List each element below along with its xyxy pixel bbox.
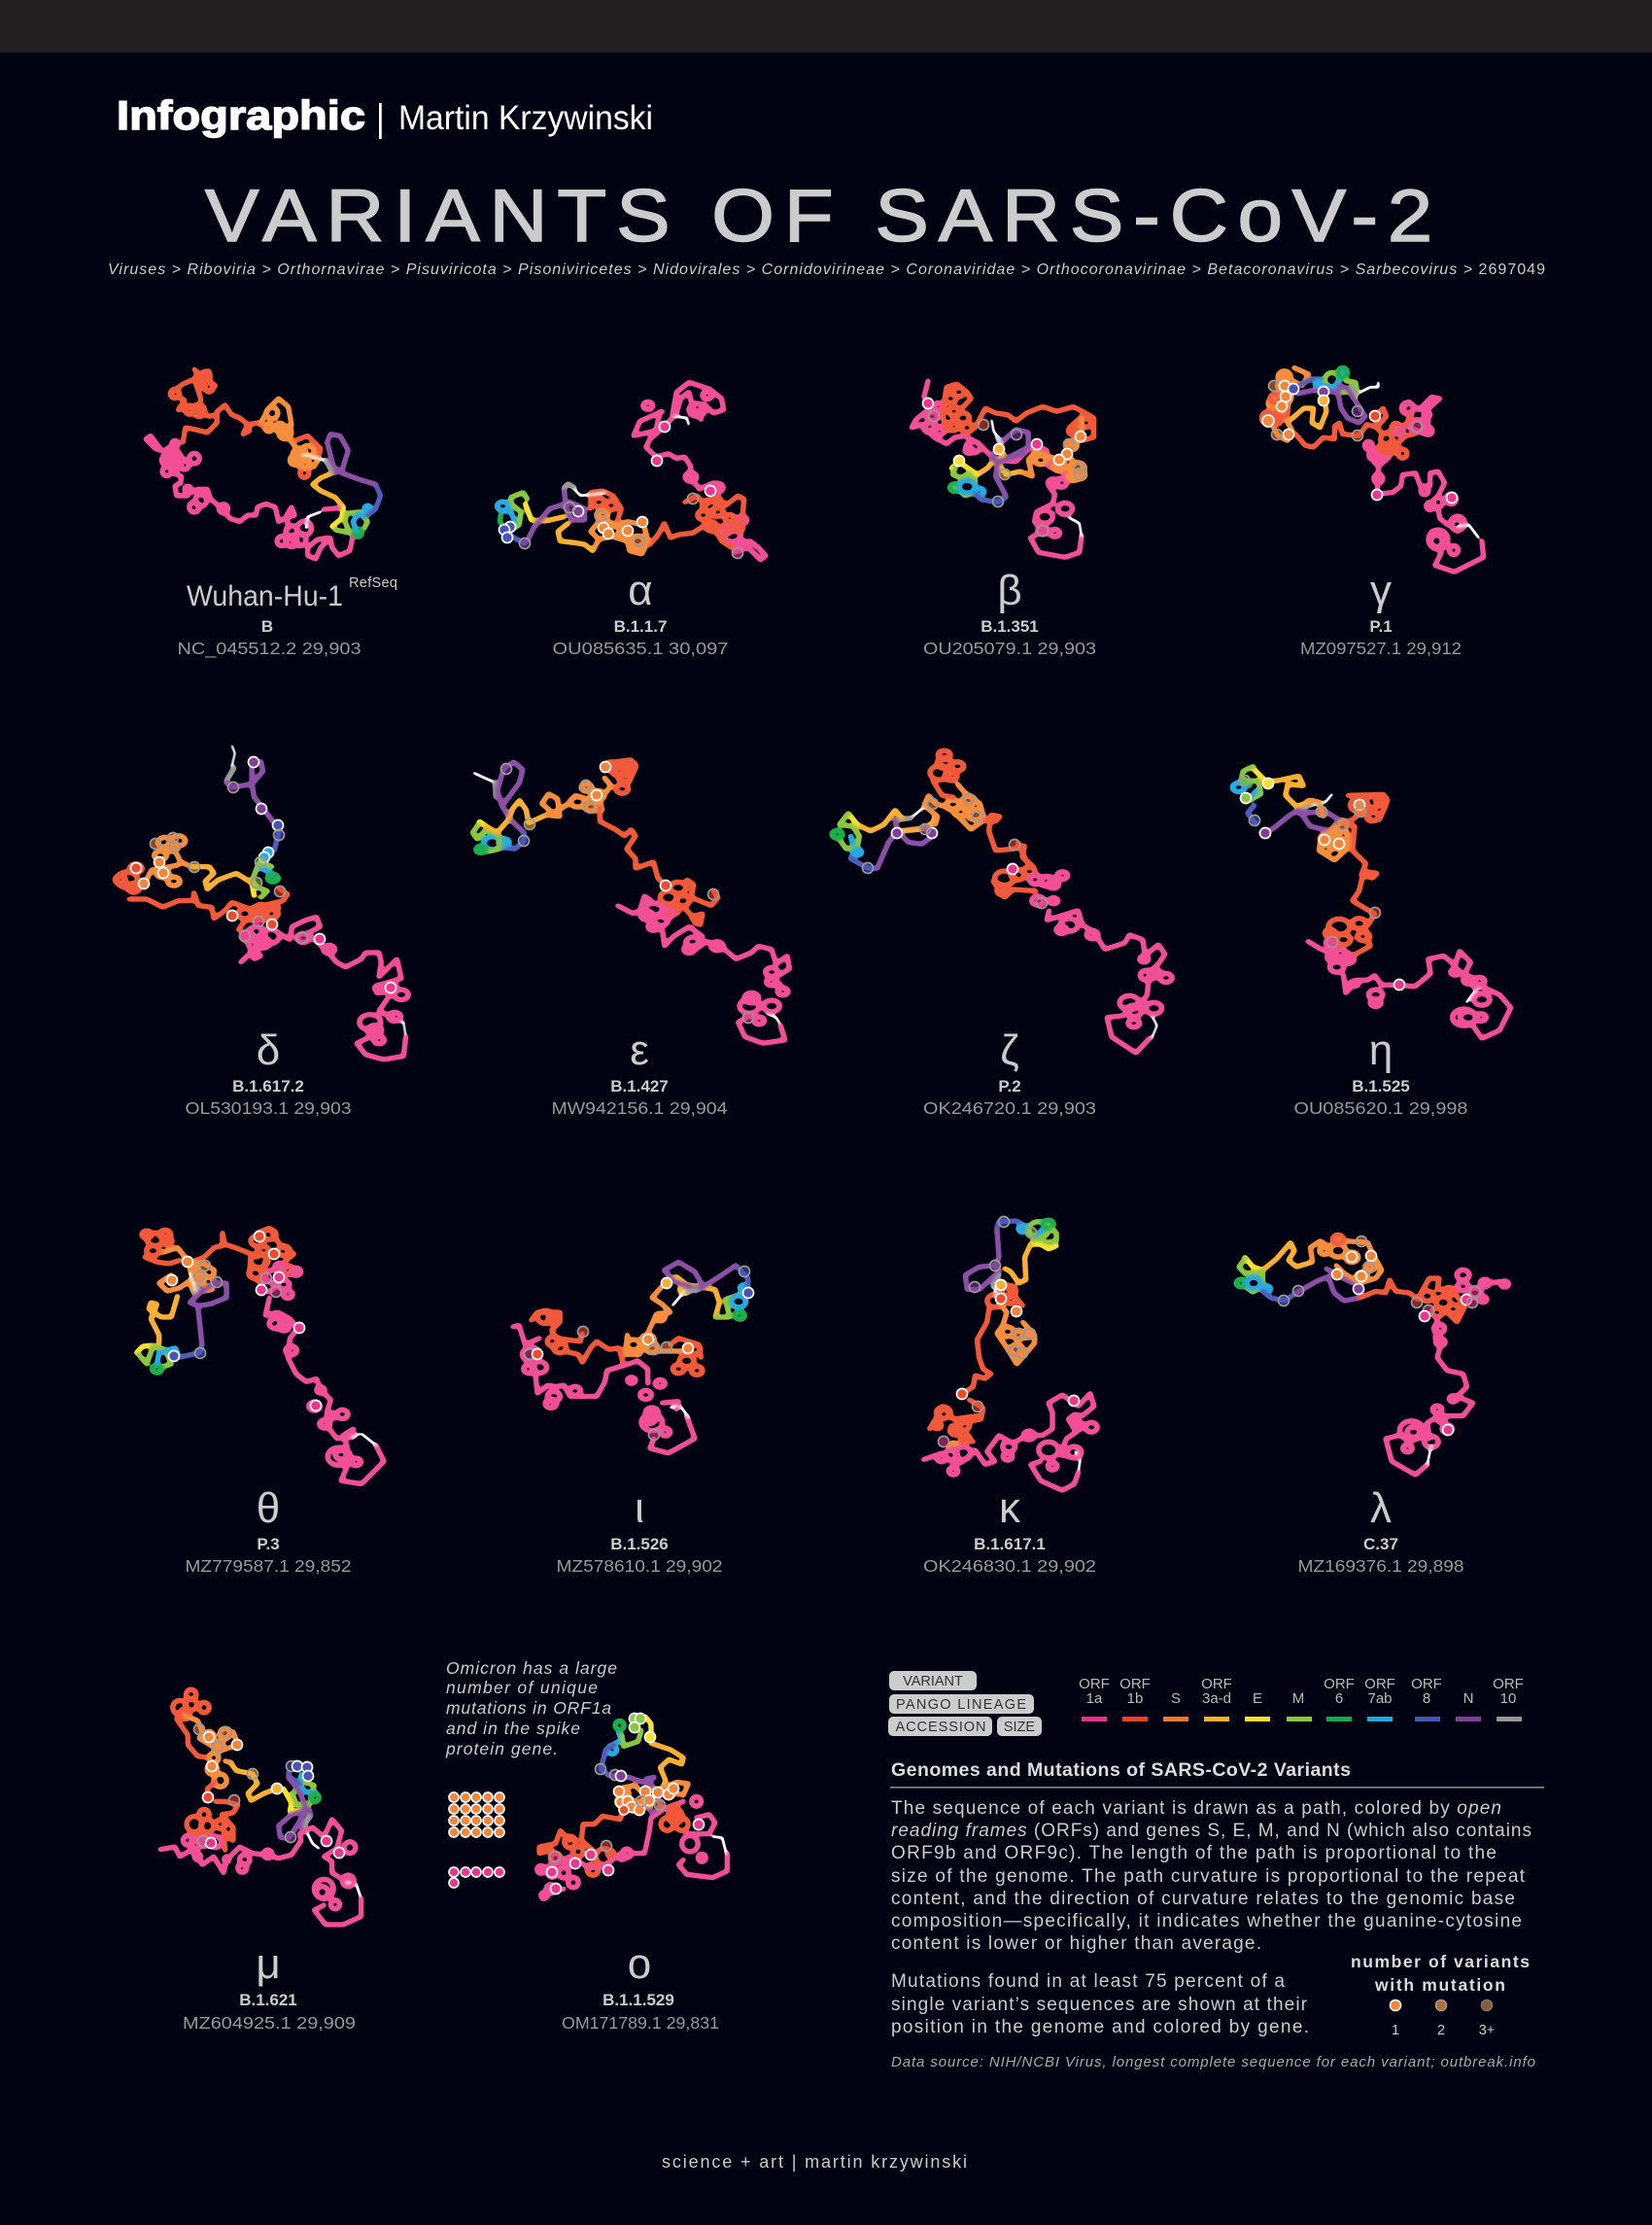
label: lambda: MZ169376.1 29,898 [1298,1556,1463,1576]
legend: gene colour key: 8 [1423,1690,1430,1707]
label: delta: OL530193.1 29,903 [185,1098,352,1118]
legend: number of variants with mutation: with mutation [1374,1975,1505,1995]
label: theta: θ [257,1484,280,1532]
legend: gene colour key: M [1292,1690,1304,1707]
legend: gene colour key: 6 [1335,1690,1343,1707]
label: beta: OU205079.1 29,903 [923,639,1096,658]
label: epsilon [552,1026,728,1118]
text block: explanation: ORF9b and ORF9c). The length of the path is proportional to the [891,1843,1497,1863]
title: VARIANTS OF SARS-CoV-2 [205,175,1442,258]
label: beta: B.1.351 [981,617,1039,636]
label: alpha: B.1.1.7 [614,617,667,636]
label: kappa: B.1.617.1 [974,1535,1046,1553]
genome path: iota [513,1262,754,1453]
label: Wuhan-Hu-1: RefSeq [349,575,397,591]
omicron note: number of unique [446,1678,598,1697]
legend: gene colour key: 3a-d [1202,1690,1231,1707]
legend: gene colour key: N [1463,1690,1473,1707]
label: gamma: P.1 [1369,617,1393,636]
legend: number of variants with mutation [1351,1952,1530,2038]
legend: gene colour key: ORF [1364,1676,1395,1692]
label: kappa: OK246830.1 29,902 [923,1556,1096,1576]
legend: gene colour key: S [1171,1690,1181,1707]
genome path: lambda [1236,1234,1509,1475]
genome path: theta [137,1228,384,1484]
label: gamma [1300,567,1462,658]
text block: explanation: composition—specifically, it indicates whether the guanine-cytosine [891,1911,1522,1931]
label: alpha: OU085635.1 30,097 [552,639,729,658]
text block: explanation [891,1798,1532,1954]
legend: number of variants with mutation: 1 [1392,2023,1399,2038]
legend: gene colour key: 7ab [1367,1690,1393,1707]
genome path: eta [1232,766,1511,1038]
legend: gene colour key: ORF [1324,1676,1355,1692]
header: Infographic byline [117,92,653,139]
header: Infographic byline: Martin Krzywinski [398,99,653,137]
mutation dots: omicron [546,1713,704,1894]
legend: number of variants with mutation: 3+ [1479,2023,1495,2038]
label: eta: η [1369,1026,1393,1074]
text block: mutations [891,1971,1309,2037]
label: Wuhan-Hu-1: NC_045512.2 29,903 [177,639,361,659]
label: theta: P.3 [257,1535,280,1553]
label: alpha: α [628,567,653,614]
mutation dots: zeta [863,793,1048,908]
genome path: epsilon [472,760,789,1043]
omicron note [445,1658,617,1758]
label: kappa [923,1484,1096,1576]
legend: label tags: SIZE [1004,1720,1035,1735]
label: theta [185,1484,352,1576]
footer: science + art | martin krzywinski [662,2152,967,2172]
mutation dots: mu [194,1724,344,1859]
genome path: beta [912,381,1094,557]
legend: gene colour key: ORF [1201,1676,1232,1692]
legend: label tags: ACCESSION [896,1720,985,1735]
legend: gene colour key: 1a [1086,1690,1103,1707]
label: omicron [562,1940,719,2033]
label: epsilon: ε [630,1026,649,1074]
label: zeta: OK246720.1 29,903 [923,1098,1096,1118]
label: theta: MZ779587.1 29,852 [185,1556,352,1576]
legend: gene colour key: ORF [1493,1676,1524,1692]
legend: gene colour key: 1b [1127,1690,1143,1707]
genome path: delta [115,746,408,1060]
label: kappa: κ [999,1484,1021,1532]
label: zeta: ζ [1000,1026,1019,1074]
genome path: mu [160,1689,361,1925]
label: eta: B.1.525 [1352,1077,1410,1095]
label: zeta [923,1026,1096,1118]
mutation dots: beta [923,399,1086,537]
header: Infographic byline: Infographic [117,92,365,138]
label: epsilon: B.1.427 [610,1077,669,1095]
mutation dots: alpha [499,422,742,558]
label: mu [183,1940,356,2033]
label: Wuhan-Hu-1: Wuhan-Hu-1 [187,580,343,612]
label: eta [1294,1026,1467,1118]
label: lambda: λ [1370,1484,1392,1532]
label: alpha [552,567,729,658]
label: gamma: γ [1370,567,1392,614]
legend: label tags [888,1671,1042,1736]
label: delta [185,1026,352,1118]
legend: gene colour key: ORF [1079,1676,1110,1692]
label: gamma: MZ097527.1 29,912 [1300,639,1462,658]
label: lambda: C.37 [1363,1535,1398,1553]
text block: mutations: position in the genome and colored by gene. [891,2017,1309,2037]
text block: explanation: reading frames (ORFs) and genes S, E, M, and N (which also contains [891,1821,1532,1841]
legend: gene colour key [1079,1676,1524,1721]
genome path: omicron [537,1713,727,1898]
legend: gene colour key: ORF [1119,1676,1151,1692]
legend: label tags: VARIANT [903,1674,963,1689]
legend: label tags: PANGO LINEAGE [896,1697,1026,1713]
label: omicron: OM171789.1 29,831 [562,2013,719,2033]
legend: number of variants with mutation: number of variants [1351,1952,1530,1971]
label: zeta: P.2 [998,1077,1021,1095]
text block: explanation: content, and the direction of curvature relates to the genomic base [891,1889,1515,1909]
genome path: gamma [1261,367,1484,572]
label: mu: B.1.621 [239,1991,297,2009]
legend: gene colour key: 10 [1500,1690,1516,1707]
label: Wuhan-Hu-1 [177,575,397,659]
legend: gene colour key: ORF [1411,1676,1442,1692]
omicron note: Omicron has a large [446,1658,617,1678]
mutation dots: kappa [939,1217,1079,1446]
genome path: zeta [832,750,1172,1053]
mutation dots: gamma [1262,381,1458,504]
label: mu: μ [256,1940,281,1988]
genome path: Wuhan-Hu-1 [146,369,381,559]
label: iota: B.1.526 [610,1535,669,1553]
label: epsilon: MW942156.1 29,904 [552,1098,728,1118]
label: mu: MZ604925.1 29,909 [183,2013,356,2033]
mutation dots: iota [525,1266,754,1441]
mutation dots: lambda [1279,1236,1481,1435]
text block: explanation: The sequence of each variant is drawn as a path, colored by open [891,1798,1501,1819]
mutation dots: eta [1240,776,1405,990]
text block: mutations: Mutations found in at least 75 percent of a [891,1971,1285,1992]
label: lambda [1298,1484,1463,1576]
text block: mutations: single variant’s sequences are shown at their [891,1995,1308,2015]
mutation dots: epsilon [501,762,754,1023]
genome path: alpha [497,382,766,560]
omicron note: and in the spike [446,1719,580,1738]
label: omicron: B.1.1.529 [602,1991,674,2009]
mutation dots: theta [167,1231,321,1411]
legend: number of variants with mutation: 2 [1437,2023,1445,2038]
omicron note: mutations in ORF1a [446,1698,611,1718]
omicron note: protein gene. [445,1739,558,1758]
label: iota [556,1484,723,1576]
text block: explanation: size of the genome. The path curvature is proportional to the repeat [891,1866,1526,1887]
text block: explanation: content is lower or higher than average. [891,1933,1261,1954]
label: iota: ι [635,1484,644,1532]
mutation dots: delta [130,756,396,993]
heading: explanation: Genomes and Mutations of SARS-CoV-2 Variants [891,1759,1351,1781]
legend: gene colour key: E [1253,1690,1262,1707]
label: beta: β [997,567,1022,614]
taxonomy line: Viruses > Riboviria > Orthornavirae > Pisuviricota > Pisoniviricetes > Nidovirales > Cornidovirineae > Coronaviridae > Orthocoronavirinae > Betacoronavirus > Sarbecovirus > 2697049 [108,261,1545,278]
label: iota: MZ578610.1 29,902 [556,1556,723,1576]
label: omicron: ο [628,1940,651,1988]
data source: Data source: NIH/NCBI Virus, longest complete sequence for each variant; outbreak.info [891,2054,1535,2070]
label: delta: B.1.617.2 [232,1077,304,1095]
label: beta [923,567,1096,658]
genome path: kappa [923,1217,1097,1490]
unique mutation dot grids [449,1792,504,1888]
label: eta: OU085620.1 29,998 [1294,1098,1467,1118]
label: delta: δ [257,1026,280,1074]
label: Wuhan-Hu-1: B [261,617,273,636]
